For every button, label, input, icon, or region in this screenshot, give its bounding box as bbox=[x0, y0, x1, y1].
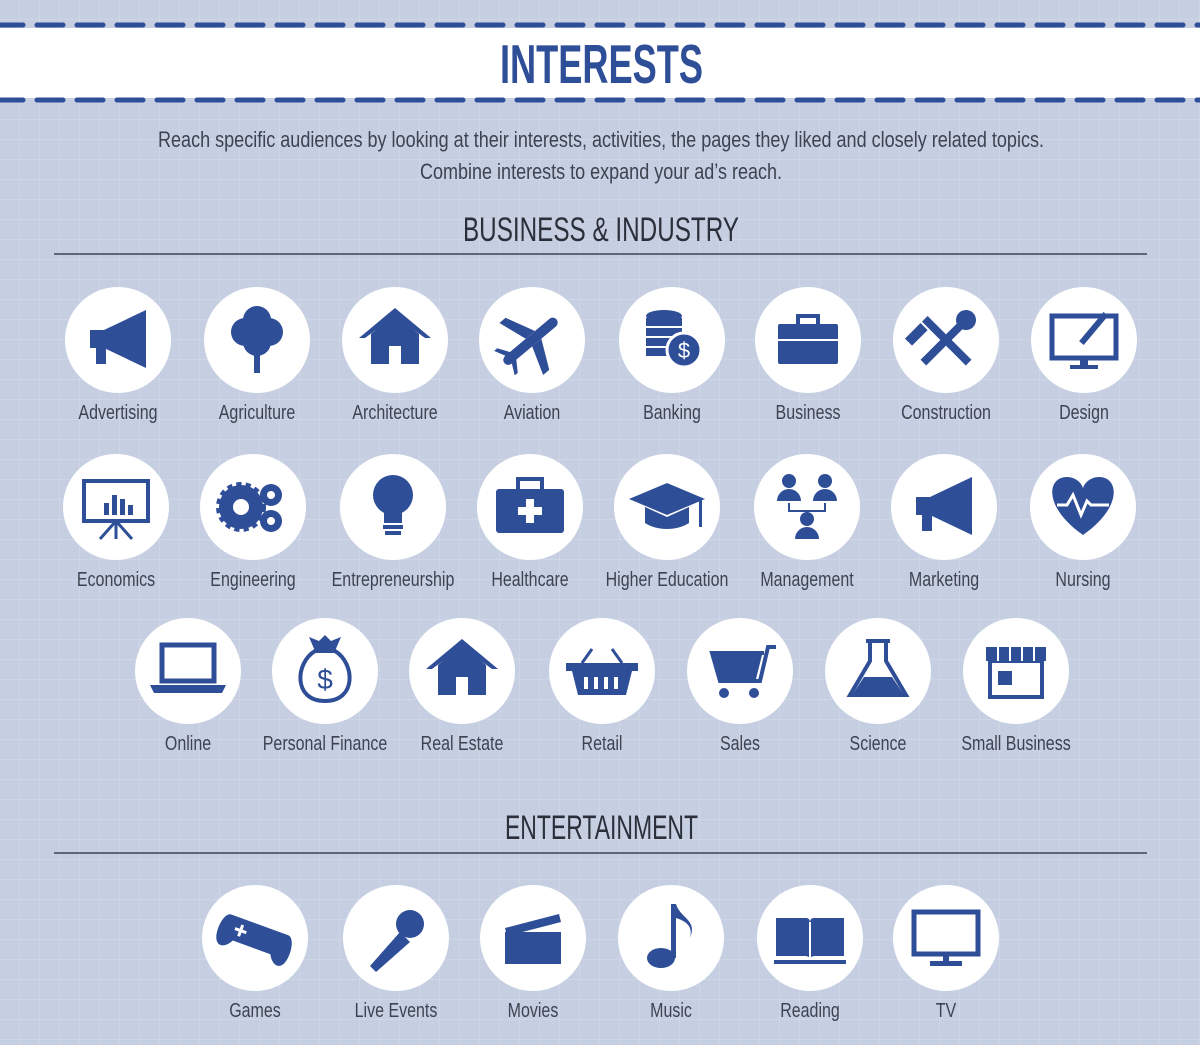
item: Entrepreneurship: Entrepreneurship bbox=[332, 568, 454, 590]
title: INTERESTS bbox=[500, 33, 703, 95]
item: Marketing bbox=[891, 454, 997, 590]
item: Engineering bbox=[200, 454, 306, 590]
item: Nursing bbox=[1030, 454, 1136, 590]
item: Architecture bbox=[342, 287, 448, 423]
item: Live Events bbox=[343, 885, 449, 1021]
item: Advertising bbox=[65, 287, 171, 423]
item: Online bbox=[135, 618, 241, 754]
item: Personal Finance: $ bbox=[317, 664, 333, 695]
item: Aviation bbox=[479, 287, 585, 423]
subtitle bbox=[158, 127, 1044, 184]
item: Construction: Construction bbox=[901, 401, 991, 423]
item: Retail: Retail bbox=[582, 732, 622, 754]
item: Nursing: Nursing bbox=[1055, 568, 1111, 590]
item: Design bbox=[1031, 287, 1137, 423]
item: Engineering: Engineering bbox=[210, 568, 296, 590]
item: TV bbox=[893, 885, 999, 1021]
item: Reading: Reading bbox=[780, 999, 840, 1021]
item: Games: Games bbox=[229, 999, 281, 1021]
item: Movies: Movies bbox=[508, 999, 558, 1021]
item: Music bbox=[618, 885, 724, 1021]
item: Personal Finance: Personal Finance bbox=[263, 732, 387, 754]
item: Healthcare bbox=[477, 454, 583, 590]
item: Business bbox=[755, 287, 861, 423]
item: Online: Online bbox=[165, 732, 211, 754]
heading: business & industry: BUSINESS & INDUSTRY bbox=[463, 211, 739, 249]
item: Construction bbox=[893, 287, 999, 423]
item: Movies bbox=[480, 885, 586, 1021]
item: Marketing: Marketing bbox=[909, 568, 979, 590]
item: Real Estate bbox=[409, 618, 515, 754]
item: Personal Finance bbox=[263, 618, 387, 754]
item: Agriculture: Agriculture bbox=[219, 401, 295, 423]
item: Economics: Economics bbox=[77, 568, 155, 590]
item: Music: Music bbox=[650, 999, 692, 1021]
subtitle: Combine interests to expand your ad’s reach. bbox=[420, 159, 782, 184]
item: Design: Design bbox=[1059, 401, 1109, 423]
item: Small Business: Small Business bbox=[961, 732, 1071, 754]
item: Sales bbox=[687, 618, 793, 754]
item: Economics bbox=[63, 454, 169, 590]
item: TV: TV bbox=[936, 999, 956, 1021]
item: Management: Management bbox=[760, 568, 854, 590]
item: Science: Science bbox=[850, 732, 906, 754]
item: Live Events: Live Events bbox=[355, 999, 437, 1021]
item: Advertising: Advertising bbox=[78, 401, 158, 423]
item: Agriculture bbox=[204, 287, 310, 423]
item: Retail bbox=[549, 618, 655, 754]
item: Business: Business bbox=[776, 401, 840, 423]
header band bbox=[0, 25, 1200, 100]
item: Higher Education: Higher Education bbox=[606, 568, 728, 590]
item: Games bbox=[202, 885, 308, 1021]
item: Architecture: Architecture bbox=[352, 401, 438, 423]
heading: entertainment: ENTERTAINMENT bbox=[505, 809, 698, 847]
item: Sales: Sales bbox=[720, 732, 760, 754]
item: Banking: $ bbox=[678, 338, 690, 363]
item: Banking: Banking bbox=[643, 401, 701, 423]
item: Banking bbox=[619, 287, 725, 423]
item: Aviation: Aviation bbox=[504, 401, 560, 423]
item: Management bbox=[754, 454, 860, 590]
item: Higher Education bbox=[606, 454, 728, 590]
item: Small Business bbox=[961, 618, 1071, 754]
item: Science bbox=[825, 618, 931, 754]
item: Entrepreneurship bbox=[332, 454, 454, 590]
item: Reading bbox=[757, 885, 863, 1021]
item: Healthcare: Healthcare bbox=[491, 568, 569, 590]
item: Real Estate: Real Estate bbox=[421, 732, 503, 754]
